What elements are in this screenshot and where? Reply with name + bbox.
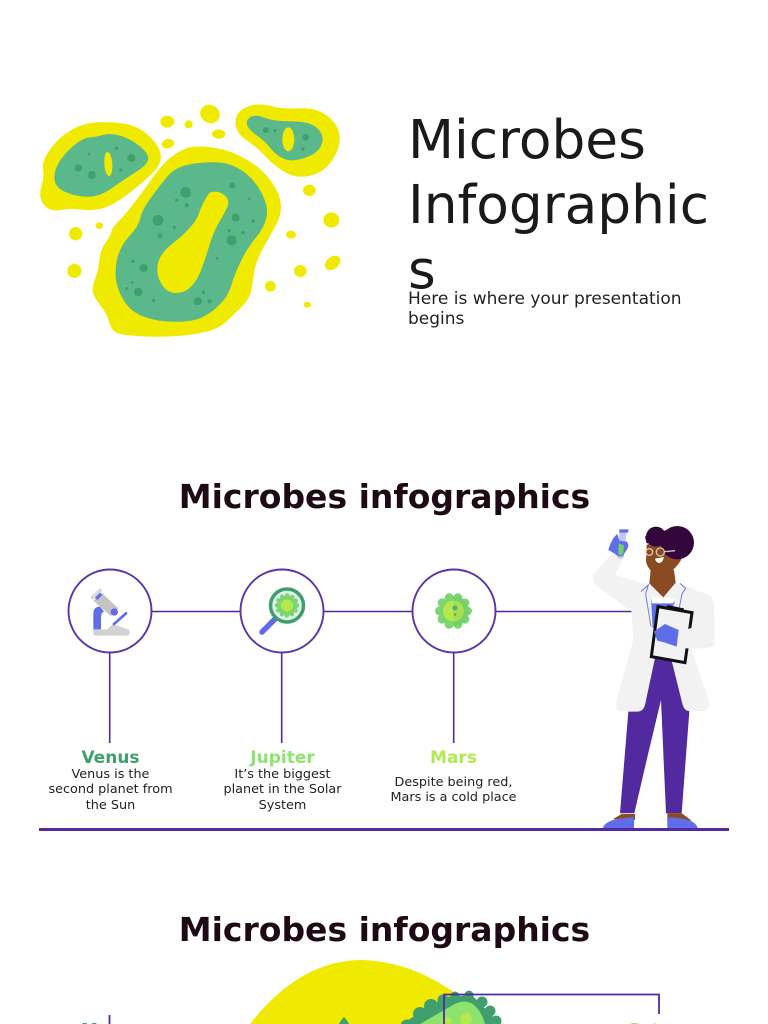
label: Mars xyxy=(390,748,517,805)
label: Mars: Mars is a cold place xyxy=(390,790,517,805)
virus: bottom illustration xyxy=(400,990,502,1024)
icon: microscope xyxy=(90,588,129,636)
icon: magnifying glass over virus xyxy=(262,589,304,632)
illustration: scientist xyxy=(593,526,714,829)
heading: first infographic section: Microbes infographics xyxy=(179,477,590,516)
label: Mars: Despite being red, xyxy=(395,775,512,790)
node: microscope xyxy=(68,570,152,652)
subtitle: begins xyxy=(408,309,465,329)
clipboard xyxy=(651,605,692,663)
label: Jupiter: planet in the Solar xyxy=(223,782,342,797)
subtitle: Here is where your presentation xyxy=(408,289,682,309)
subtitle xyxy=(408,289,682,329)
label: Jupiter xyxy=(223,748,342,813)
microbes: small floating specks xyxy=(67,101,343,308)
scientist sleeve xyxy=(678,620,714,648)
illustration: microbes cluster xyxy=(42,101,343,335)
scientist coat xyxy=(593,552,714,712)
microbe: large central cell xyxy=(94,148,280,335)
node: magnifier xyxy=(240,570,324,652)
small virus tip xyxy=(339,1017,349,1024)
heading: second infographic section: Microbes infographics xyxy=(179,910,590,949)
title: s xyxy=(408,239,436,301)
label: Jupiter: Jupiter xyxy=(249,748,315,768)
scientist glasses xyxy=(646,548,675,556)
bracket connector lines xyxy=(110,994,659,1024)
test tube and raised glove xyxy=(608,529,629,559)
label: Venus: Venus is the xyxy=(72,767,150,782)
label: Venus: Venus xyxy=(81,748,140,768)
scientist legs xyxy=(620,653,689,813)
label: Venus xyxy=(48,748,173,813)
ground line xyxy=(39,828,729,831)
title xyxy=(408,109,709,301)
scientist collar xyxy=(641,583,686,627)
title: Microbes xyxy=(408,109,646,171)
scientist hair xyxy=(645,526,694,559)
title: Infographic xyxy=(408,174,709,236)
icon: virus xyxy=(438,596,469,626)
scientist shirt xyxy=(651,598,675,628)
label: Venus: second planet from xyxy=(48,782,173,797)
microbe: left cell xyxy=(42,124,159,209)
timeline connector lines xyxy=(110,612,633,743)
scientist gloved hand xyxy=(654,624,679,647)
microbe: top right cell xyxy=(238,107,337,174)
label: Jupiter: It’s the biggest xyxy=(234,767,331,782)
scientist shoes xyxy=(603,813,698,829)
label: Venus: the Sun xyxy=(86,798,135,813)
node: virus xyxy=(412,570,496,652)
label: Jupiter: System xyxy=(259,798,306,813)
label: Mars: Mars xyxy=(430,748,477,768)
scientist neck and head xyxy=(645,526,694,597)
yellow background blob xyxy=(250,960,470,1024)
